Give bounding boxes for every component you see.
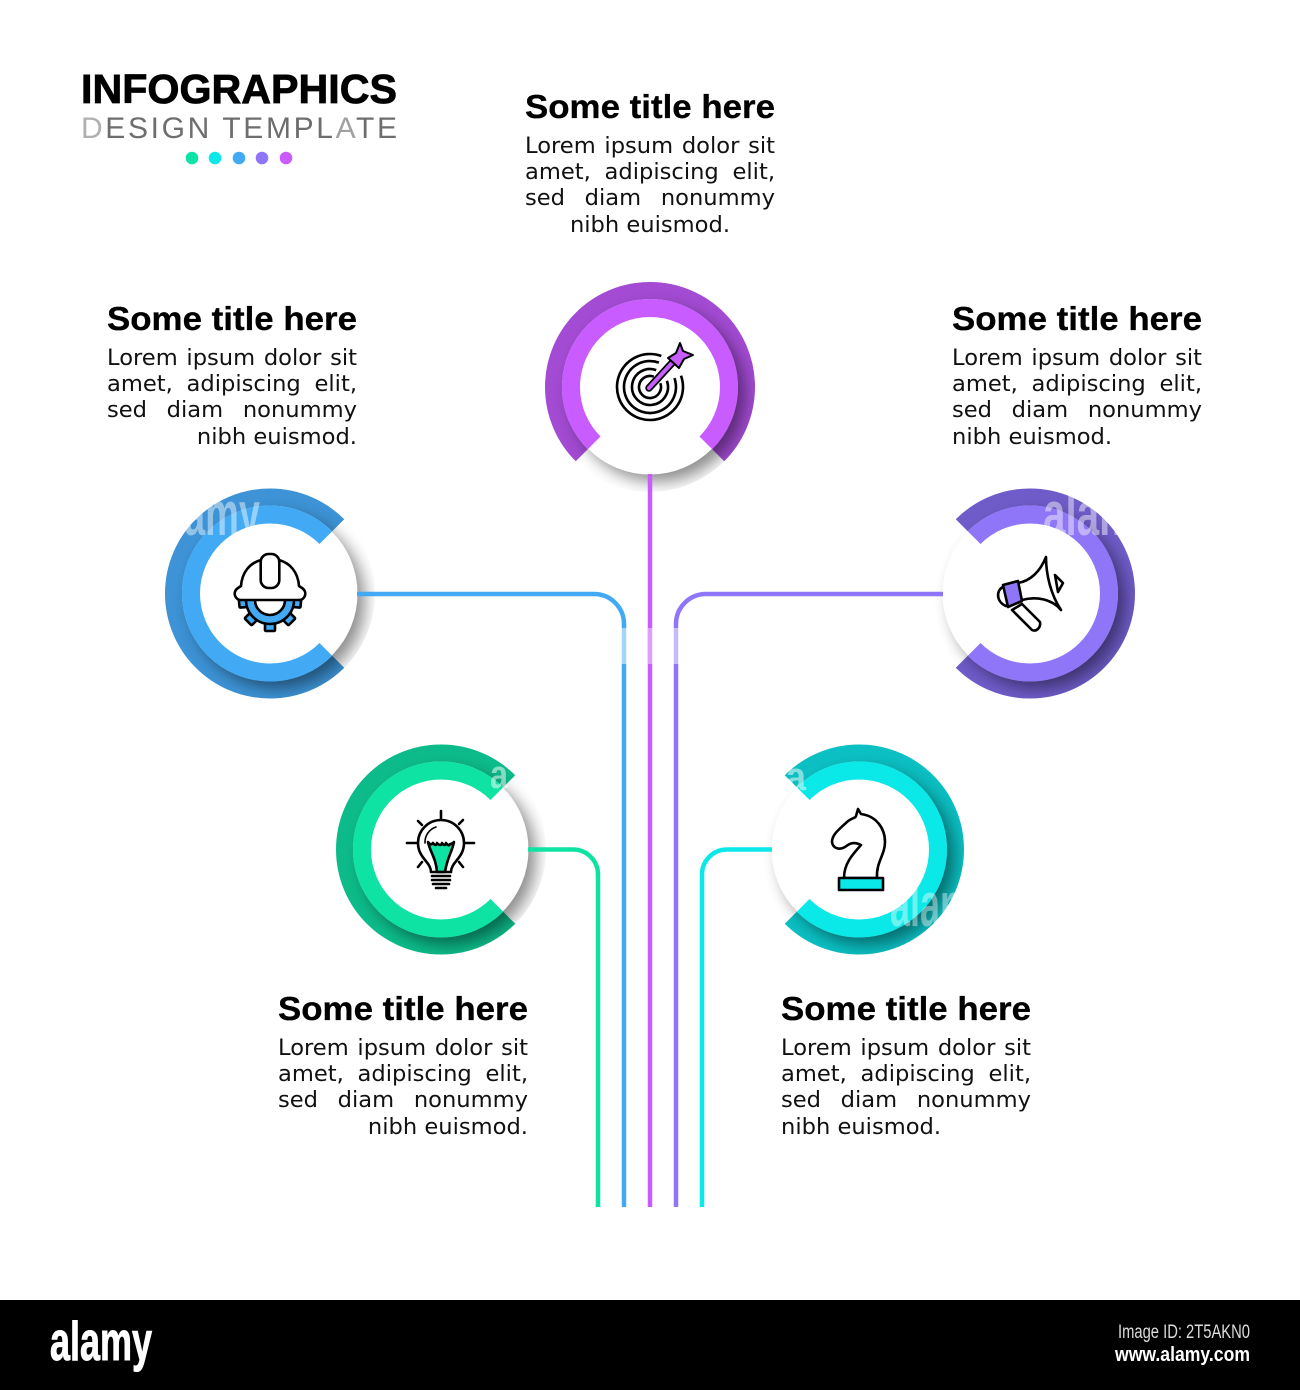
text block: left: sed diam nonummy [107,397,357,423]
text block: top: Some title here [525,88,775,125]
ring: bottom-right cyan [772,753,955,946]
website: www.alamy.com [1114,1344,1250,1366]
heading: infographics design template [81,66,397,164]
colour dots [186,152,292,164]
text block: bottom right: nibh euismod. [781,1114,941,1140]
heading line: DESIGN TEMPLATE: DESIGN TEMPLATE [81,112,397,145]
watermark traces: alam [1043,480,1135,549]
text block: bottom left: Some title here [278,990,528,1027]
heading line: INFOGRAPHICS: INFOGRAPHICS [81,66,397,112]
connector lines [357,474,943,1207]
text block: left [107,300,357,450]
text block: bottom left: sed diam nonummy [278,1087,528,1113]
text block: bottom left: Lorem ipsum dolor sit [278,1035,528,1061]
text block: right: Some title here [952,300,1202,337]
ring: top purple [554,291,746,482]
icon: target with arrow [617,343,693,420]
icon: light bulb [407,811,474,888]
icon: megaphone [998,557,1063,631]
text block: right: sed diam nonummy [952,397,1202,423]
icon: chess knight [832,809,885,890]
text block: bottom right: sed diam nonummy [781,1087,1031,1113]
text block: top: Lorem ipsum dolor sit [525,133,775,159]
ring: left blue [174,497,365,690]
connector: cyan [702,850,772,1207]
text block: bottom left: amet, adipiscing elit, [278,1061,528,1087]
text block: top: sed diam nonummy [525,185,775,211]
text block: bottom right [781,990,1031,1140]
footer bar [0,1300,1300,1390]
connector: purple [648,474,652,1207]
text block: left: Some title here [107,300,357,337]
text block: left: Lorem ipsum dolor sit [107,345,357,371]
connector: violet [676,594,943,1207]
text block: bottom right: Lorem ipsum dolor sit [781,1035,1031,1061]
watermark traces: a [786,755,807,799]
ring: bottom-left green [345,753,536,946]
text block: bottom right: amet, adipiscing elit, [781,1061,1031,1087]
text block: left: amet, adipiscing elit, [107,371,357,397]
connector: green [528,850,598,1207]
watermark traces [184,480,1135,940]
text block: right: Lorem ipsum dolor sit [952,345,1202,371]
connector: blue [357,594,624,1207]
watermark traces: amy [184,480,260,549]
text block: right: nibh euismod. [952,424,1112,450]
text block: top: nibh euismod. [570,212,730,238]
icon: hard hat with gear [235,554,305,631]
text block: top [525,88,775,238]
text block: right: amet, adipiscing elit, [952,371,1202,397]
text block: top: amet, adipiscing elit, [525,159,775,185]
text block: left: nibh euismod. [197,424,357,450]
ring: right violet [942,497,1126,690]
text block: bottom left: nibh euismod. [368,1114,528,1140]
footer logo: alamy [50,1310,152,1372]
text block: bottom left [278,990,528,1140]
text block: bottom right: Some title here [781,990,1031,1027]
text block: right [952,300,1202,450]
watermark traces: a [490,753,509,797]
image id: Image ID: 2T5AKN0 [1118,1322,1250,1343]
watermark traces: alan [890,871,962,940]
